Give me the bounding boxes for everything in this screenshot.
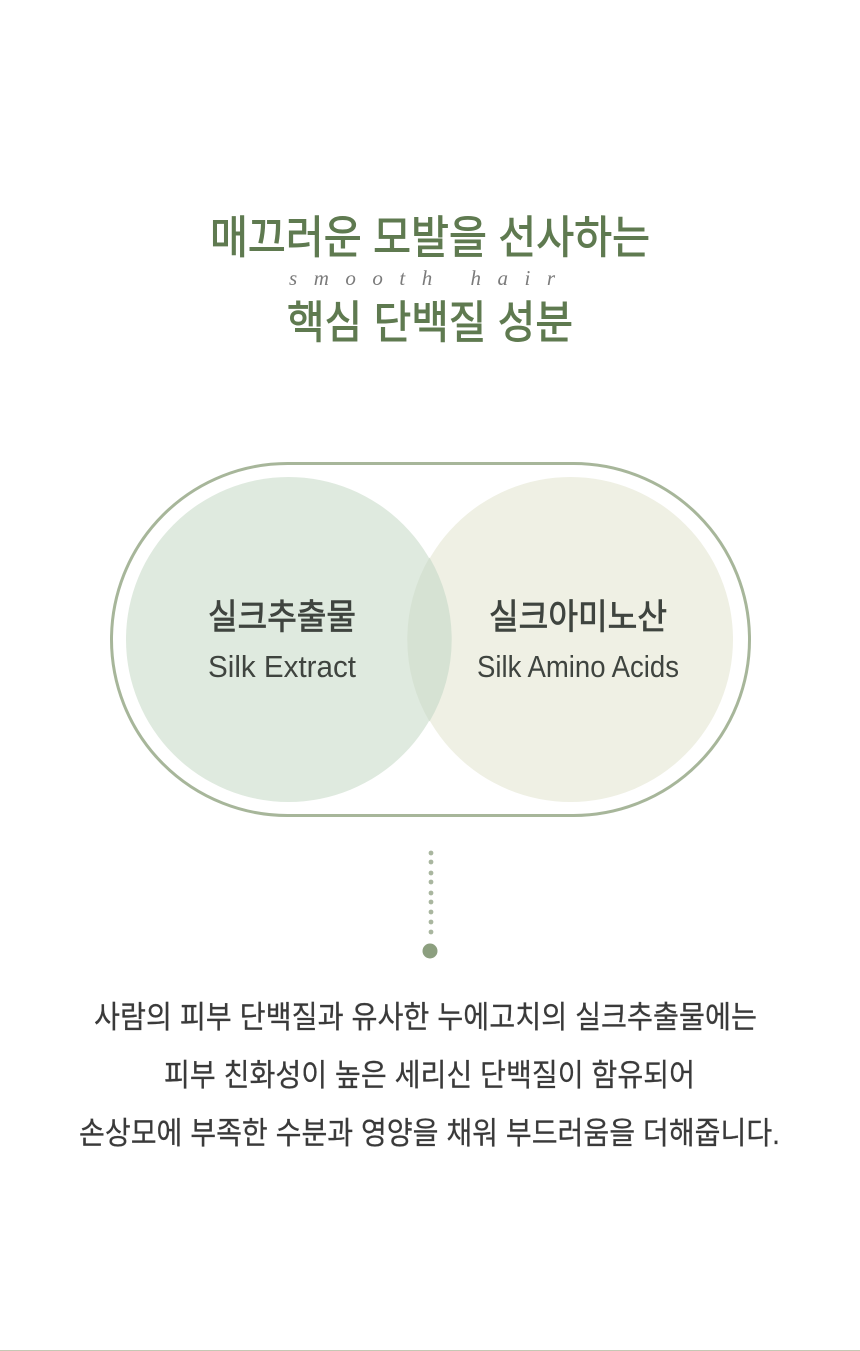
title line 1: 매끄러운 모발을 선사하는 — [210, 212, 650, 263]
pill outline — [112, 464, 750, 816]
label: silk amino acids: Silk Amino Acids — [477, 649, 679, 684]
label: silk extract — [208, 598, 356, 684]
script subtitle: smooth hair — [289, 266, 556, 290]
overlap — [407, 558, 452, 722]
circle: silk amino acids — [408, 477, 733, 802]
label: silk amino acids — [477, 598, 679, 684]
bottom edge line — [0, 1350, 860, 1351]
dotted connector — [422, 851, 438, 958]
title line 2: 핵심 단백질 성분 — [287, 297, 573, 348]
venn diagram — [112, 464, 750, 816]
description text — [79, 1000, 780, 1151]
description line 2: 피부 친화성이 높은 세리신 단백질이 함유되어 — [164, 1058, 695, 1093]
description line 1: 사람의 피부 단백질과 유사한 누에고치의 실크추출물에는 — [94, 1000, 757, 1035]
circle: silk extract — [126, 477, 451, 802]
label: silk extract: Silk Extract — [208, 649, 356, 684]
label: silk extract: 실크추출물 — [208, 598, 356, 637]
title — [210, 212, 650, 348]
description line 3: 손상모에 부족한 수분과 영양을 채워 부드러움을 더해줍니다. — [79, 1116, 780, 1151]
label: silk amino acids: 실크아미노산 — [489, 598, 667, 637]
